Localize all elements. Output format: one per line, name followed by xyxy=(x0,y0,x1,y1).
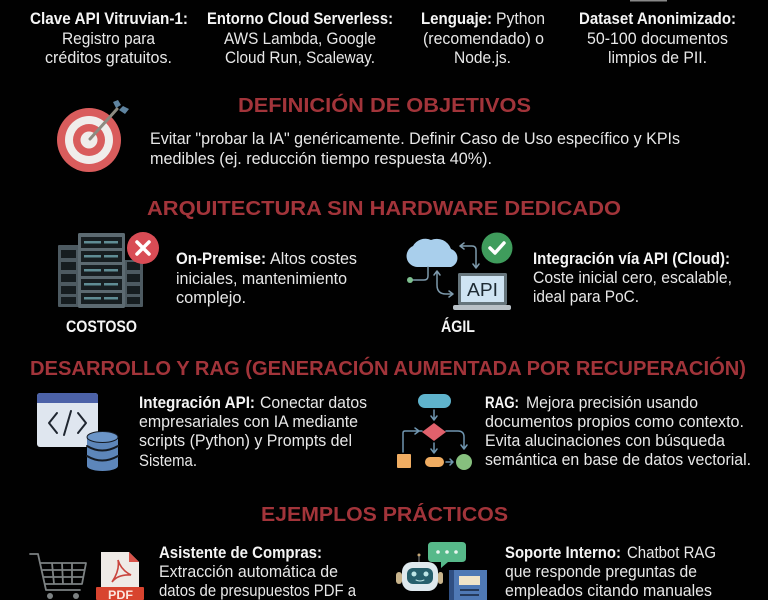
label: costoso: COSTOSO xyxy=(66,317,137,336)
heading: arquitectura: ARQUITECTURA SIN HARDWARE DEDICADO xyxy=(147,197,621,220)
text block: clave API: Registro para xyxy=(62,29,155,48)
text block: dataset: Dataset Anonimizado: xyxy=(579,9,736,28)
text block: asistente de compras: Extracción automática de xyxy=(159,562,338,581)
text block: soporte interno: que responde preguntas de xyxy=(505,562,697,581)
icon: cloud API: API xyxy=(467,280,498,300)
text block: on-premise: complejo. xyxy=(176,288,246,307)
text block: RAG: semántica en base de datos vectorial. xyxy=(485,450,751,469)
text block: objetivos xyxy=(150,129,680,168)
icon: PDF document xyxy=(96,552,144,600)
text block: dataset: limpios de PII. xyxy=(608,48,707,67)
text block: lenguaje: Node.js. xyxy=(454,48,511,67)
text block: clave API: Clave API Vitruvian-1: xyxy=(30,9,188,28)
text block: integración API: empresariales con IA mediante xyxy=(139,412,358,431)
text block: integración API: Conectar datos xyxy=(260,393,367,412)
text block: integración API: Integración API: xyxy=(139,393,255,412)
icon: error badge xyxy=(127,232,159,264)
text block: integración cloud: ideal para PoC. xyxy=(533,287,639,306)
text block: entorno cloud xyxy=(207,9,393,67)
panel: requisitos xyxy=(30,9,736,67)
heading: ejemplos prácticos: EJEMPLOS PRÁCTICOS xyxy=(261,503,508,526)
text block: integración cloud xyxy=(533,249,732,306)
icon: target xyxy=(57,100,129,172)
icon: cloud API xyxy=(407,232,512,310)
text block: asistente de compras: Asistente de Compras: xyxy=(159,543,322,562)
text block: soporte interno: empleados citando manuales xyxy=(505,581,712,600)
label: ágil: ÁGIL xyxy=(441,317,475,336)
text block: integración cloud: Coste inicial cero, escalable, xyxy=(533,268,732,287)
text block: clave API: créditos gratuitos. xyxy=(45,48,172,67)
icon: shopping cart xyxy=(30,554,86,599)
text block: RAG: Mejora precisión usando xyxy=(526,393,698,412)
text block: objetivos: medibles (ej. reducción tiempo respuesta 40%). xyxy=(150,149,492,168)
text block: soporte interno xyxy=(505,543,716,600)
text block: dataset xyxy=(579,9,736,67)
text block: integración API: Sistema. xyxy=(139,451,197,470)
text block: asistente de compras: datos de presupuestos PDF a xyxy=(159,581,356,600)
icon: RAG flowchart xyxy=(397,394,472,470)
text block: RAG: RAG: xyxy=(485,393,519,412)
text block: clave API xyxy=(30,9,188,67)
text block: lenguaje: Lenguaje: xyxy=(421,9,492,28)
text block: entorno cloud: AWS Lambda, Google xyxy=(224,29,376,48)
text block: on-premise: On-Premise: xyxy=(176,249,266,268)
icon: robot and book xyxy=(396,542,487,600)
text block: soporte interno: Soporte Interno: xyxy=(505,543,621,562)
text block: soporte interno: Chatbot RAG xyxy=(627,543,716,562)
text block: lenguaje: (recomendado) o xyxy=(423,29,544,48)
text block: dataset: 50-100 documentos xyxy=(587,29,728,48)
text block: integración API xyxy=(139,393,367,470)
text block: entorno cloud: Entorno Cloud Serverless: xyxy=(207,9,393,28)
heading: desarrollo y RAG: DESARROLLO Y RAG (GENERACIÓN AUMENTADA POR RECUPERACIÓN) xyxy=(30,356,746,380)
icon: code and database xyxy=(37,393,118,471)
text block: on-premise xyxy=(176,249,357,307)
text block: RAG xyxy=(485,393,751,469)
text block: asistente de compras xyxy=(159,543,356,600)
text block: integración API: scripts (Python) y Prompts del xyxy=(139,431,352,450)
text block: entorno cloud: Cloud Run, Scaleway. xyxy=(225,48,375,67)
icon: servers xyxy=(58,232,159,308)
text block: on-premise: iniciales, mantenimiento xyxy=(176,269,347,288)
text block: RAG: Evita alucinaciones con búsqueda xyxy=(485,431,725,450)
heading: definición de objetivos: DEFINICIÓN DE OBJETIVOS xyxy=(238,93,531,117)
text block: on-premise: Altos costes xyxy=(270,249,357,268)
text block: integración cloud: Integración vía API (Cloud): xyxy=(533,249,730,268)
icon: check badge xyxy=(482,232,512,264)
text block: RAG: documentos propios como contexto. xyxy=(485,412,744,431)
text block: lenguaje: Python xyxy=(496,9,545,28)
text block: lenguaje xyxy=(421,9,545,67)
text block: objetivos: Evitar "probar la IA" genéricamente. Definir Caso de Uso específico y KPIs xyxy=(150,129,680,148)
